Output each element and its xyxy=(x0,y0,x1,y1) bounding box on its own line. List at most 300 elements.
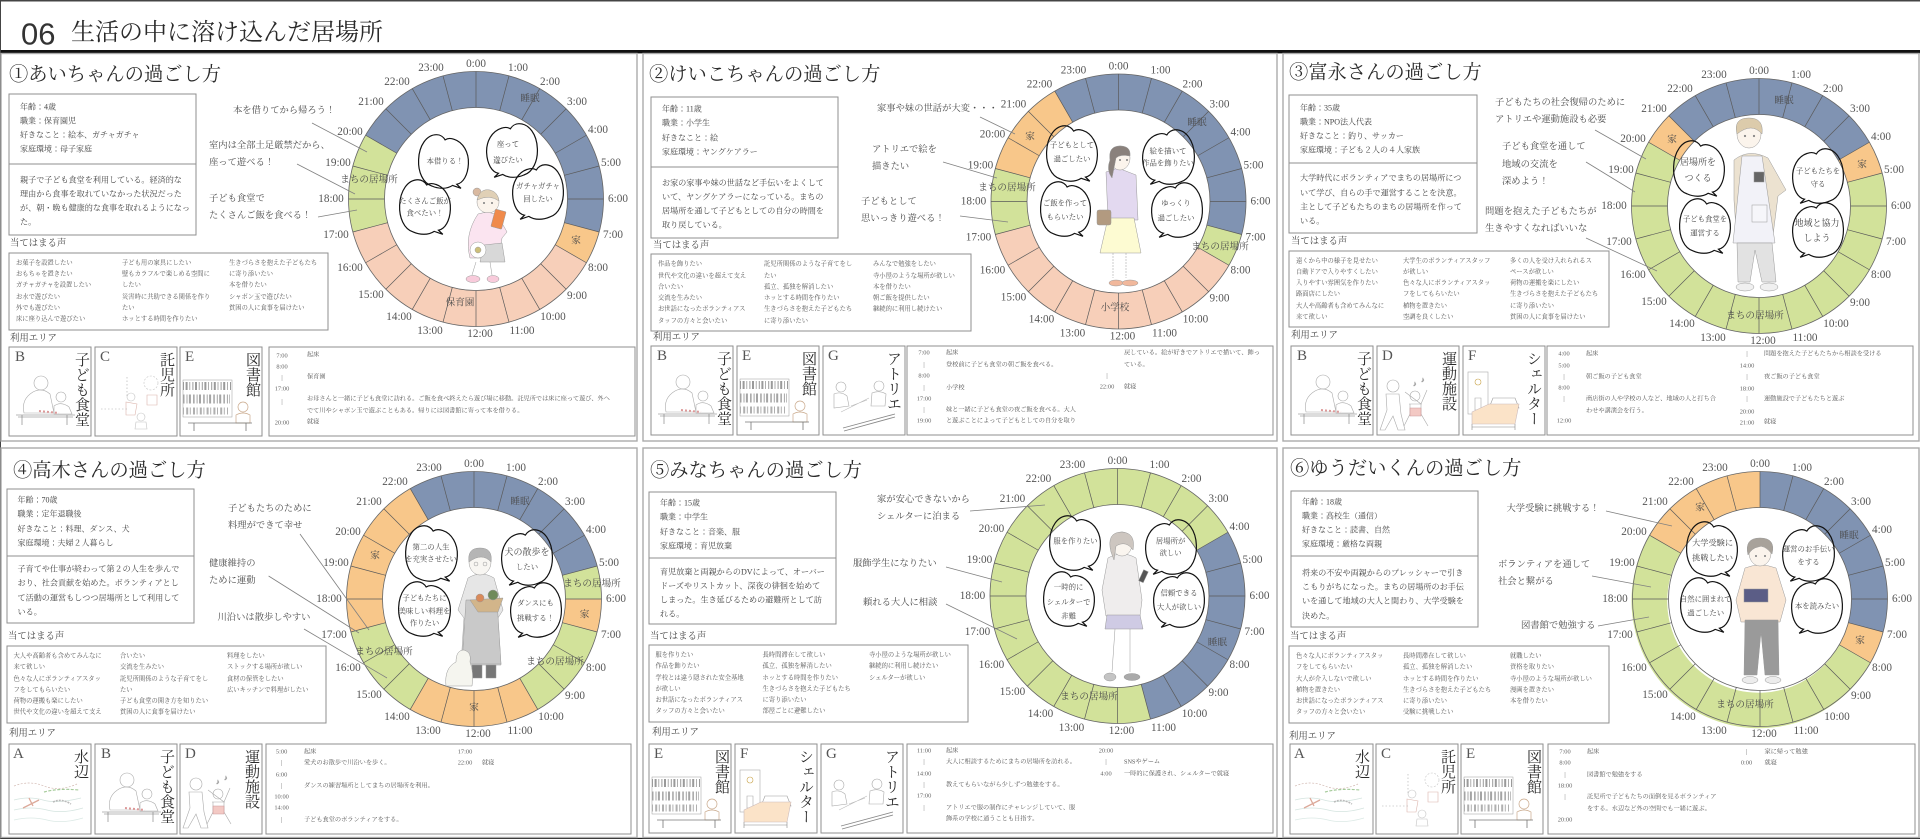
profile box: 家庭環境：ヤングケアラー xyxy=(662,146,758,156)
bubble: sit and play xyxy=(487,124,537,177)
callout: 大学受験に挑戦する！ xyxy=(1506,502,1599,514)
area card C xyxy=(95,347,177,436)
schedule xyxy=(907,744,1273,833)
profile box: 取り戻している。 xyxy=(662,220,727,230)
chart: 24-hour ring: 6:00 xyxy=(1891,200,1911,212)
bubble xyxy=(399,582,450,636)
bubble: 挑戦したい xyxy=(1692,552,1733,562)
area card D: D xyxy=(1382,348,1393,364)
area card D: 運動施設 xyxy=(1440,351,1456,411)
schedule: 17:00 xyxy=(275,386,289,392)
voices list: 合いたい xyxy=(120,650,145,660)
voices list: お世話になったボランティアス xyxy=(656,694,743,704)
chart: 24-hour ring: 22:00 xyxy=(1668,476,1694,488)
bubble: 守る xyxy=(1811,180,1825,188)
voices list: 貧困の人に食事を届けたい xyxy=(120,706,196,716)
voices list: 作品を飾りたい xyxy=(658,258,702,268)
voices list: 孤立、孤独を解消したい xyxy=(764,282,833,290)
area card E: E xyxy=(654,746,663,762)
bubble: 欲しい xyxy=(1160,548,1182,558)
chart: 24-hour ring: 1:00 xyxy=(1150,459,1170,471)
voices list: 路面店にしたい xyxy=(1296,288,1340,298)
schedule: | xyxy=(281,374,283,382)
chart: 24-hour ring: 11:00 xyxy=(1151,722,1176,734)
callout: 地域の交流を xyxy=(1502,158,1558,170)
chart: 24-hour ring: 10:00 xyxy=(1824,711,1850,723)
schedule: と遊ぶことによって子どもとしての自分を取り xyxy=(946,416,1076,424)
voices list: 朝ご飯を提供したい xyxy=(873,292,930,302)
voices list: 学校とは違う隠された安全基地 xyxy=(656,672,744,682)
callout xyxy=(228,503,369,630)
area card F: シェルター xyxy=(797,749,813,824)
voices list: 孤立、孤独を解消したい xyxy=(762,660,832,670)
bubble: 大学受験に xyxy=(1692,538,1733,548)
figure: man with apron xyxy=(1733,118,1786,291)
voices list: 孤立、孤独を解消したい xyxy=(1403,662,1472,670)
bubble: 大人が欲しい xyxy=(1157,602,1201,612)
chart: 24-hour ring: 睡眠 xyxy=(510,496,530,508)
voices list: 合いたい xyxy=(658,282,683,290)
voices list: 色々な人にボランティアスタッ xyxy=(14,674,101,682)
voices list: ペースが欲しい xyxy=(1510,266,1554,276)
schedule: 18:00 xyxy=(1558,782,1572,790)
profile box: 好きなこと：音楽、服 xyxy=(660,526,740,536)
chart: 24-hour ring: 16:00 xyxy=(979,659,1005,671)
chart: 24-hour ring: 3:00 xyxy=(567,96,587,108)
profile box: 大学時代にボランティアでまちの居場所につ xyxy=(1300,172,1461,182)
voices list: 長時間滞在して欲しい xyxy=(762,650,825,658)
area card G: G xyxy=(828,348,839,364)
area card E xyxy=(649,744,731,833)
chart: 24-hour ring: 20:00 xyxy=(1620,133,1646,145)
voices list: 寺小屋のような場所が欲しい xyxy=(1510,674,1592,682)
schedule: 問題を抱えた子どもたちから相談を受ける xyxy=(1764,350,1882,358)
chart: 24-hour ring: 3:00 xyxy=(1210,98,1230,110)
chart: 24-hour ring: 0:00 xyxy=(466,58,486,70)
bubble: 服を作りたい xyxy=(1053,536,1098,546)
bubble xyxy=(1152,183,1202,237)
voices list: みんなで勉強をしたい xyxy=(873,258,936,268)
bubble: 絵を描いて xyxy=(1150,146,1186,156)
panel: 6 ゆうだいくん xyxy=(1283,448,1919,838)
callout xyxy=(1521,617,1649,631)
voices list: 寺小屋のような場所が欲しい xyxy=(873,270,955,280)
chart: 24-hour ring: 23:00 xyxy=(1060,459,1086,471)
profile box: 理由から食事を取れていなかった状況だった xyxy=(20,188,182,198)
callout: indoors: 室内は全部土足厳禁だから、 xyxy=(209,139,330,151)
schedule: 起床 xyxy=(304,748,316,756)
voices list: ホッとする時間を作りたい xyxy=(764,292,840,302)
schedule: 子ども食堂のボランティアをする。 xyxy=(304,816,403,824)
area card G: アトリエ xyxy=(883,749,899,809)
chart: 24-hour ring: 小学校 xyxy=(1101,302,1130,314)
chart: 24-hour ring: 17:00 xyxy=(1606,236,1632,248)
chart: 24-hour ring: 2:00 xyxy=(1183,78,1203,90)
chart: 24-hour ring: 0:00 xyxy=(1108,455,1128,467)
bubble xyxy=(405,526,457,581)
voices list: 大人や高齢者も含めてみんなに xyxy=(14,650,102,660)
chart: 24-hour ring: 11:00 xyxy=(509,325,535,337)
area card D: 運動施設 xyxy=(243,749,260,809)
callout: atelier: アトリエで絵を xyxy=(872,143,937,155)
profile box xyxy=(1289,95,1477,233)
chart: 24-hour ring: 17:00 xyxy=(321,629,347,641)
title xyxy=(21,16,383,52)
schedule: | xyxy=(1746,748,1747,756)
bubble: 作品を飾りたい xyxy=(1142,158,1194,168)
bubble xyxy=(1154,573,1204,627)
chart: 24-hour ring: 2:00 xyxy=(1823,83,1843,95)
chart: 24-hour ring xyxy=(1602,458,1912,740)
profile box: 職業：中学生 xyxy=(660,512,708,522)
chart: 24-hour ring: 家 xyxy=(1695,502,1705,514)
voices list: 空調を良くしたい xyxy=(1403,312,1453,320)
schedule: 17:00 xyxy=(917,396,931,402)
bubble: 美味しい料理を xyxy=(399,606,450,616)
voices list: 生きづらさを抱えた子どもたち xyxy=(229,258,317,266)
bubble: borrow book xyxy=(419,135,468,188)
chart: 24-hour ring: 10:00 xyxy=(538,711,564,723)
chart: 24-hour ring: 13:00 xyxy=(417,325,443,337)
area card E: 図書館 xyxy=(713,749,730,794)
title: 生活の中に溶け込んだ居場所 xyxy=(71,19,383,46)
chart: 24-hour ring: 16:00 xyxy=(1621,662,1647,674)
chart: 24-hour ring: 20:00 xyxy=(979,523,1005,535)
schedule: 21:00 xyxy=(1740,420,1754,426)
chart: 24-hour ring: 15:00 xyxy=(358,289,384,301)
voices list: が欲しい xyxy=(656,684,681,692)
schedule: 妹と一緒に子ども食堂の夜ご飯を食べる。大人 xyxy=(946,406,1076,414)
profile box: 年齢：70歳 xyxy=(18,494,58,504)
chart: 24-hour ring: 18:00 xyxy=(1602,593,1628,605)
area card B: B xyxy=(1297,348,1307,364)
callout: 図書館で勉強する xyxy=(1521,619,1595,631)
bubble: 子ども食堂を xyxy=(1683,214,1727,224)
callout: indoors: 座って遊べる！ xyxy=(209,156,274,168)
schedule xyxy=(1547,346,1913,435)
profile box: が、朝・晩も健康的な食事を取れるようになっ xyxy=(20,202,190,212)
schedule: 7:00 xyxy=(276,352,288,360)
chart: 24-hour ring: 11:00 xyxy=(507,725,533,737)
schedule: でて川やシャボン玉で遊ぶこともある。帰りには図書館に寄って本を借りる。 xyxy=(307,406,523,414)
schedule: | xyxy=(281,398,283,406)
chart: 24-hour ring: 14:00 xyxy=(1029,314,1055,326)
panel: 2 けいこちゃん xyxy=(643,54,1277,441)
chart: 24-hour ring: 8:00 xyxy=(1231,264,1251,276)
bubble xyxy=(1687,522,1737,576)
schedule: 一時的に保護され、シェルターで就寝 xyxy=(1124,770,1229,778)
chart: 24-hour ring: 16:00 xyxy=(1620,269,1646,281)
schedule: 4:00 xyxy=(1558,350,1570,358)
area heading: 利用エリア xyxy=(1289,730,1336,742)
profile box: 好きなこと：料理、ダンス、犬 xyxy=(18,524,130,534)
bubble: もらいたい xyxy=(1047,212,1083,222)
voices list: 受験に挑戦したい xyxy=(1403,706,1453,716)
voices list: 壁もカラフルで楽しめる空間に xyxy=(122,268,210,278)
bubble: 子どもたちを xyxy=(1796,166,1840,176)
bubble: eat a lot xyxy=(399,180,451,234)
area card C xyxy=(1376,744,1458,834)
schedule: 5:00 xyxy=(276,748,287,756)
schedule: 20:00 xyxy=(1740,408,1754,416)
area card E xyxy=(180,347,262,436)
area card E: 図書館 xyxy=(244,352,260,397)
chart: 24-hour ring: 17:00 xyxy=(1607,629,1633,641)
schedule: 14:00 xyxy=(1740,362,1754,370)
area card E xyxy=(737,346,819,435)
chart: 24-hour ring: まちの居場所 xyxy=(978,182,1036,194)
voices list: に寄り添いたい xyxy=(764,316,808,324)
chart: 24-hour ring: 20:00 xyxy=(335,526,361,538)
schedule: 就寝 xyxy=(1764,418,1776,426)
chart: 24-hour ring: 16:00 xyxy=(335,662,361,674)
profile box: 育児放棄と両親からのDVによって、オーバー xyxy=(660,566,825,576)
title: 06 xyxy=(21,16,55,52)
chart: 24-hour ring: 家 xyxy=(469,702,479,714)
area card D: D xyxy=(185,746,196,762)
chart: 24-hour ring: 6:00 xyxy=(608,193,628,205)
profile box: 好きなこと：絵本、ガチャガチャ xyxy=(20,130,140,140)
callout: アトリエや運動施設も必要 xyxy=(1495,113,1607,125)
voices list: 託児所関係のような子育てをし xyxy=(764,258,852,268)
voices list: 大人が介入しないで欲しい xyxy=(1296,674,1372,682)
chart: 24-hour ring: 15:00 xyxy=(356,689,382,701)
chart: 24-hour ring: 3:00 xyxy=(1209,493,1229,505)
chart: 24-hour ring: 10:00 xyxy=(1183,314,1209,326)
area card E xyxy=(1461,744,1543,834)
chart: 24-hour ring: 8:00 xyxy=(586,662,606,674)
voices list: 遠くから中の様子を見せたい xyxy=(1296,256,1378,264)
chart: 24-hour ring: 23:00 xyxy=(1702,462,1728,474)
chart: 24-hour ring: 22:00 xyxy=(384,76,410,88)
callout xyxy=(1506,502,1672,526)
chart: 24-hour ring: 13:00 xyxy=(1700,332,1726,344)
chart: 24-hour ring: 6:00 xyxy=(606,593,626,605)
schedule: 14:00 xyxy=(274,804,289,812)
chart: 24-hour ring: 13:00 xyxy=(1060,328,1086,340)
schedule: 教えてもらいながら少しずつ勉強をする。 xyxy=(946,780,1064,788)
bubble: 子どもとして xyxy=(1050,140,1094,150)
chart: 24-hour ring: 睡眠 xyxy=(1187,118,1207,128)
chart: 24-hour ring: まちの居場所 xyxy=(1191,240,1249,252)
chart: 24-hour ring: 13:00 xyxy=(415,725,441,737)
schedule: をする。水辺など外の空間でも一緒に遊ぶ。 xyxy=(1587,804,1711,812)
chart: 24-hour ring: 睡眠 xyxy=(1208,638,1228,648)
profile box: れる。 xyxy=(660,610,684,618)
voices list: 貧困の人に食事を届けたい xyxy=(1510,312,1586,320)
profile box xyxy=(651,97,838,238)
area card B: 子ども食堂 xyxy=(158,749,174,824)
area heading: 利用エリア xyxy=(1291,329,1338,341)
area card F: F xyxy=(1468,348,1476,364)
schedule: 4:00 xyxy=(1100,770,1112,778)
schedule: | xyxy=(1563,396,1565,402)
bubble xyxy=(1142,130,1194,184)
chart: 24-hour ring: 14:00 xyxy=(384,711,410,723)
chart: 24-hour ring: 21:00 xyxy=(358,96,384,108)
chart: 24-hour ring: 4:00 xyxy=(586,524,606,536)
chart: 24-hour ring: 17:00 xyxy=(966,232,992,244)
voices list xyxy=(7,646,326,723)
schedule: | xyxy=(1564,794,1566,800)
schedule: | xyxy=(1564,772,1566,778)
bubble: 作りたい xyxy=(410,618,439,628)
area card C: C xyxy=(1381,746,1391,762)
bubble: をする xyxy=(1798,558,1820,566)
chart: 24-hour ring: 12:00 xyxy=(1109,725,1135,737)
bubble: つくる xyxy=(1684,173,1712,183)
voices list: 世代や文化の違いを超えて支え xyxy=(14,706,102,716)
chart: 24-hour ring: 7:00 xyxy=(603,229,623,241)
area card B xyxy=(651,346,733,435)
chart: 24-hour ring: 18:00 xyxy=(1601,200,1627,212)
bubble xyxy=(1793,149,1843,203)
schedule: 夜ご飯の子ども食堂 xyxy=(1764,372,1820,380)
chart: 24-hour ring: 23:00 xyxy=(1061,64,1087,76)
schedule: 8:00 xyxy=(1559,760,1571,766)
voices list: 広いキッチンで料理がしたい xyxy=(227,684,308,694)
area card E: E xyxy=(185,349,194,365)
callout: 健康維持の xyxy=(209,557,256,569)
schedule: 7:00 xyxy=(918,350,930,356)
bubble xyxy=(1044,572,1094,626)
voices heading: 当てはまる声 xyxy=(10,237,66,249)
voices list: 食材の保管をしたい xyxy=(227,674,284,682)
voices list: 災害時に共助できる関係を作り xyxy=(122,292,210,300)
voices list: 貧困の人に食事を届けたい xyxy=(229,302,305,312)
chart: 24-hour ring: 22:00 xyxy=(1027,78,1053,90)
callout xyxy=(863,596,1017,639)
area heading: 利用エリア xyxy=(10,332,57,344)
schedule: 飾系の学校に通うことも目指す。 xyxy=(946,814,1038,822)
profile box: 好きなこと：釣り、サッカー xyxy=(1300,130,1404,140)
schedule: わせや講演会を行う。 xyxy=(1586,406,1648,414)
chart: 24-hour ring: 19:00 xyxy=(968,160,994,172)
voices list: ホッとする時間を作りたい xyxy=(1403,674,1479,682)
callout xyxy=(218,611,387,678)
bubble: 居場所が xyxy=(1156,536,1186,546)
callout: 子ども食堂を通して xyxy=(1502,140,1586,152)
chart: 24-hour ring: 15:00 xyxy=(1000,686,1026,698)
bubble xyxy=(1680,578,1732,632)
callout: ボランティアを通して xyxy=(1498,559,1590,570)
profile box: 居場所を通して子どもとしての自分の時間を xyxy=(662,206,824,216)
voices heading: 当てはまる声 xyxy=(653,239,709,251)
area card D xyxy=(1377,346,1459,435)
schedule: | xyxy=(1105,758,1107,766)
chart: 24-hour ring: 23:00 xyxy=(1701,69,1727,81)
chart: 24-hour ring: 19:00 xyxy=(1609,557,1635,569)
schedule: | xyxy=(281,816,282,824)
bubble: capsule toy: ガチャガチャ xyxy=(516,182,560,190)
chart: 24-hour ring: 家 xyxy=(580,608,590,620)
profile box: いて学び、自らの手で運営することを決意。 xyxy=(1300,188,1462,198)
voices list: に寄り添いたい xyxy=(762,694,807,704)
chart: 24-hour ring: 12:00 xyxy=(1110,330,1136,342)
voices list: ガチャガチャを設置したい xyxy=(16,280,91,288)
voices list: 生きづらさを抱えた子どもたち xyxy=(764,304,852,312)
chart: 24-hour ring: 15:00 xyxy=(1642,689,1668,701)
chart: 24-hour ring: 21:00 xyxy=(1641,103,1667,115)
chart: 24-hour ring: 19:00 xyxy=(967,554,993,566)
callout: 社会と繋がる xyxy=(1498,575,1554,587)
voices list: 色々な人にボランティアスタッ xyxy=(1296,650,1383,660)
callout: housework: 家事や妹の世話が大変・・・ xyxy=(877,102,998,114)
schedule: 17:00 xyxy=(917,792,931,800)
schedule: 就寝 xyxy=(1764,758,1777,766)
callout xyxy=(1502,140,1635,192)
chart: 24-hour ring: 20:00 xyxy=(337,126,363,138)
area card B xyxy=(9,347,91,436)
voices list: フをしてもらいたい xyxy=(1296,662,1353,670)
voices list: 漫画を置きたい xyxy=(1510,684,1554,694)
voices list: ホッとする時間を作りたい xyxy=(762,672,838,682)
chart: 24-hour ring xyxy=(961,60,1271,342)
schedule: 起床 xyxy=(307,350,319,358)
callout: 深めよう！ xyxy=(1502,176,1548,187)
schedule: | xyxy=(1746,350,1748,358)
bubble: しよう xyxy=(1803,233,1831,243)
bubble: ゆっくり xyxy=(1161,198,1191,208)
chart: 24-hour ring: 16:00 xyxy=(980,264,1006,276)
schedule: | xyxy=(923,384,925,392)
chart: 24-hour ring: 7:00 xyxy=(1245,626,1265,638)
profile box: いる。 xyxy=(18,608,42,616)
area card A: A xyxy=(13,746,24,762)
chart: 24-hour ring: 12:00 xyxy=(467,328,493,340)
chart: 24-hour ring: まちの居場所 xyxy=(526,656,584,668)
area card A: 水辺 xyxy=(1353,749,1370,779)
chart: 24-hour ring: 5:00 xyxy=(1243,554,1263,566)
chart: 24-hour ring: 1:00 xyxy=(1791,69,1811,81)
bubble: 居場所を xyxy=(1680,156,1716,167)
chart: 24-hour ring: 14:00 xyxy=(386,311,412,323)
profile box: 職業：定年退職後 xyxy=(18,508,82,518)
chart: 24-hour ring: 7:00 xyxy=(601,629,621,641)
schedule: | xyxy=(1563,374,1565,380)
voices list xyxy=(9,253,328,330)
chart: 24-hour ring: 4:00 xyxy=(1871,131,1891,143)
schedule: 戻している。絵が好きでアトリエで描いて、飾っ xyxy=(1124,348,1260,356)
chart: 24-hour ring: 10:00 xyxy=(1823,318,1849,330)
area card F xyxy=(735,744,817,833)
area heading: 利用エリア xyxy=(9,727,56,739)
profile box: 親子で子ども食堂を利用している。経済的な xyxy=(20,174,182,184)
profile box: 職業：保育園児 xyxy=(20,116,76,126)
schedule: 就寝 xyxy=(1124,382,1136,390)
callout: atelier xyxy=(872,143,997,178)
bubble xyxy=(511,583,561,637)
chart: 24-hour ring: 6:00 xyxy=(1251,196,1271,208)
callout: food: 子ども食堂で xyxy=(209,192,265,204)
area card B: B xyxy=(657,348,667,364)
chart: 24-hour ring: 21:00 xyxy=(1001,98,1027,110)
schedule xyxy=(269,347,635,436)
chart: 24-hour ring: 9:00 xyxy=(1209,687,1229,699)
callout: 服飾学生になりたい xyxy=(853,557,937,569)
chart: 24-hour ring: 1:00 xyxy=(1151,64,1171,76)
figure: child xyxy=(466,188,507,282)
bubble: capsule toy: 回したい xyxy=(523,194,553,204)
profile box: いて、ヤングケアラーになっている。まちの xyxy=(662,192,823,202)
voices list: たい xyxy=(120,686,133,694)
area card G: アトリエ xyxy=(885,351,901,411)
voices list: フをしてもらいたい xyxy=(1403,290,1460,298)
schedule: 図書館で勉強をする xyxy=(1587,770,1643,778)
bubble: 犬の散歩を xyxy=(504,546,550,557)
profile box: 年齢：15歳 xyxy=(660,498,700,508)
schedule: 商店街の人や学校の人など、地域の人と打ち合 xyxy=(1586,394,1716,402)
